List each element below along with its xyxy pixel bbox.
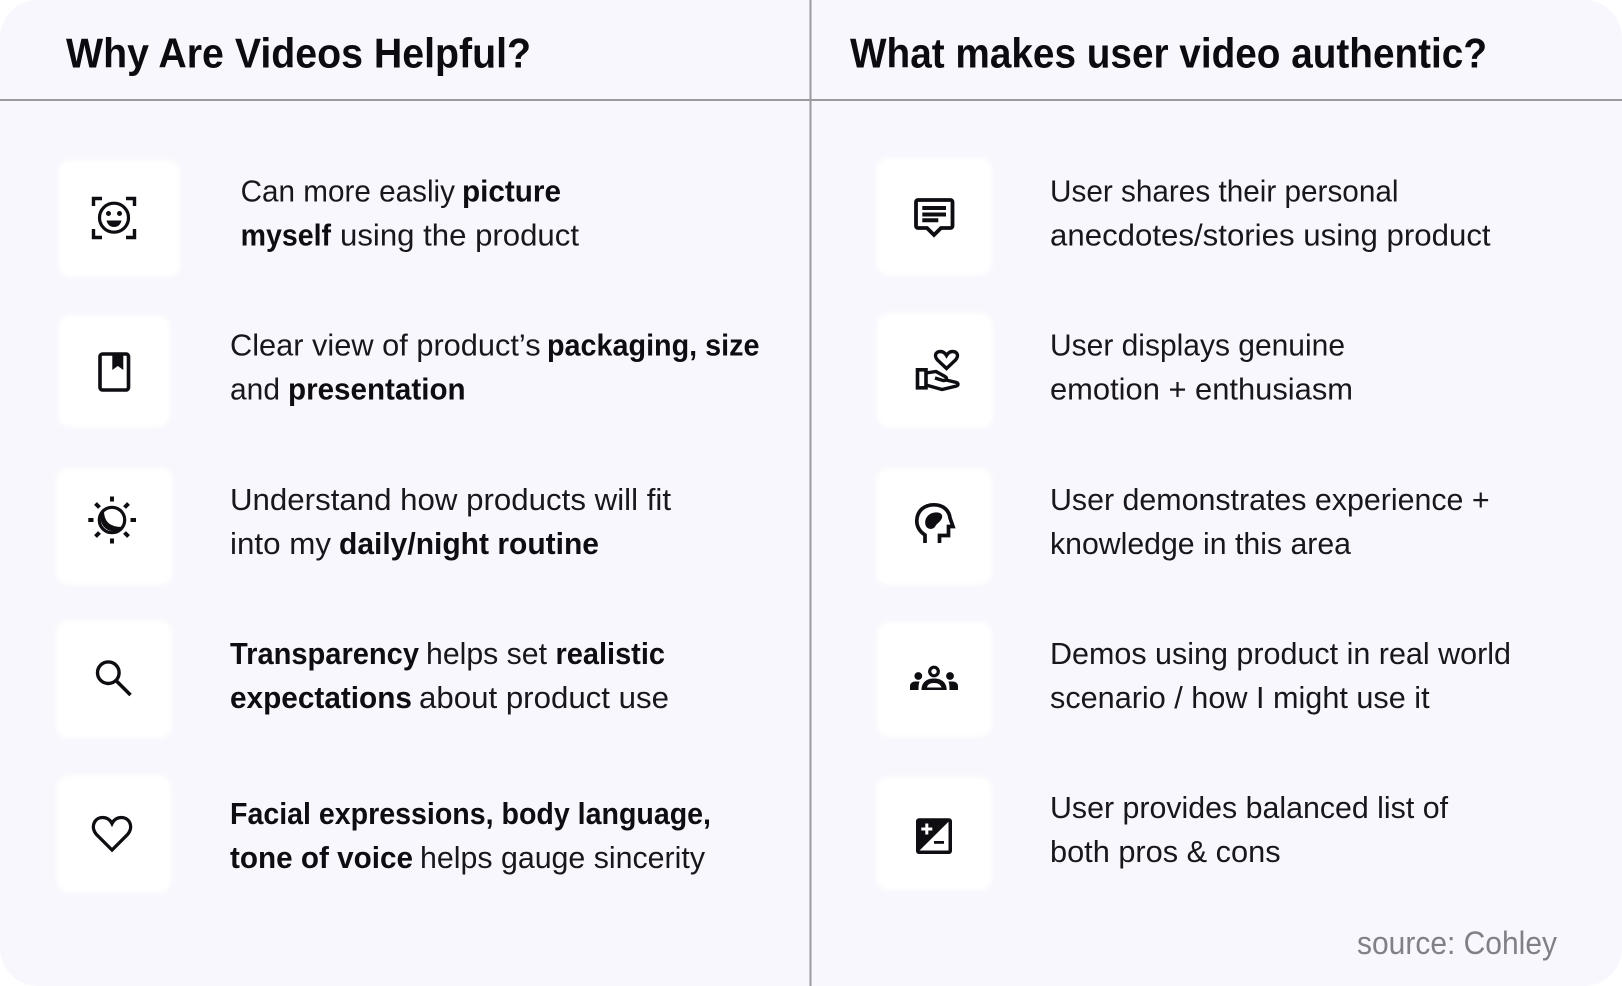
source note: source: Cohley [1357, 925, 1558, 961]
row: demos [877, 622, 1511, 737]
text: transparency [230, 637, 669, 715]
text: transparency: expectations [230, 681, 412, 715]
text: knowledge [1050, 483, 1490, 561]
icon: product box with bookmark [100, 354, 128, 390]
text: routine: daily/night routine [339, 527, 599, 561]
text: knowledge: knowledge in this area [1050, 527, 1351, 561]
panel: why videos are helpful [56, 160, 760, 893]
text: emotion: emotion + enthusiasm [1050, 372, 1353, 406]
column divider [810, 0, 812, 986]
row: transparency [56, 620, 669, 738]
text: demos: Demos using product in real world [1050, 637, 1511, 671]
text: packaging: Clear view of product’s [230, 328, 541, 362]
icon: group of people [910, 667, 958, 690]
icon: hand holding heart [918, 352, 958, 390]
row: expressions [57, 775, 711, 893]
row: pros and cons [876, 777, 1449, 890]
icon: head with brain [917, 505, 953, 543]
text: expressions: Facial expressions, body language, [230, 797, 711, 831]
text: routine [230, 483, 672, 561]
text: demos: scenario / how I might use it [1050, 681, 1430, 715]
row: picture myself [58, 160, 580, 277]
icon: magnifying glass [98, 662, 130, 695]
text: packaging: and [230, 372, 280, 406]
row: packaging [58, 315, 760, 427]
text: packaging: presentation [288, 372, 466, 406]
panel: what makes video authentic [876, 158, 1511, 890]
row: routine [56, 468, 672, 585]
text: anecdotes [1050, 174, 1491, 252]
text: routine: into my [230, 527, 332, 561]
icon: sun and moon [88, 496, 136, 544]
heading: what makes user video authentic: What makes user video authentic? [850, 30, 1487, 76]
text: picture myself: myself [241, 218, 332, 252]
text: knowledge: User demonstrates experience + [1050, 483, 1490, 517]
text: pros and cons [1050, 791, 1449, 869]
text: picture myself: picture [462, 174, 561, 208]
text: pros and cons: both pros & cons [1050, 835, 1281, 869]
text: demos [1050, 637, 1511, 715]
text: emotion: User displays genuine [1050, 328, 1345, 362]
row: anecdotes [876, 158, 1491, 275]
row: emotion [877, 313, 1353, 428]
header divider [0, 99, 1622, 101]
text: pros and cons: User provides balanced list of [1050, 791, 1449, 825]
text: expressions: tone of voice [230, 841, 413, 875]
row: knowledge [876, 468, 1490, 585]
text: expressions: helps gauge sincerity [420, 841, 706, 875]
text: anecdotes: User shares their personal [1050, 174, 1398, 208]
text: transparency: Transparency [230, 637, 419, 671]
text: packaging [230, 328, 760, 406]
icon: speech bubble [916, 200, 952, 235]
text: packaging: packaging, size [547, 328, 760, 362]
text: picture myself: using the product [340, 218, 580, 252]
text: transparency: helps set [426, 637, 548, 671]
text: transparency: about product use [419, 681, 669, 715]
text: transparency: realistic [556, 637, 665, 671]
text: picture myself: Can more easliy [241, 174, 456, 208]
text: emotion [1050, 328, 1353, 406]
text: anecdotes: anecdotes/stories using product [1050, 218, 1491, 252]
text: routine: Understand how products will fit [230, 483, 672, 517]
text: expressions [230, 797, 711, 875]
icon: face scan [94, 198, 134, 238]
icon: plus minus exposure [916, 818, 952, 854]
text: picture myself [241, 174, 580, 252]
heading: why are videos helpful: Why Are Videos Helpful? [66, 30, 531, 76]
icon: heart [93, 818, 131, 850]
